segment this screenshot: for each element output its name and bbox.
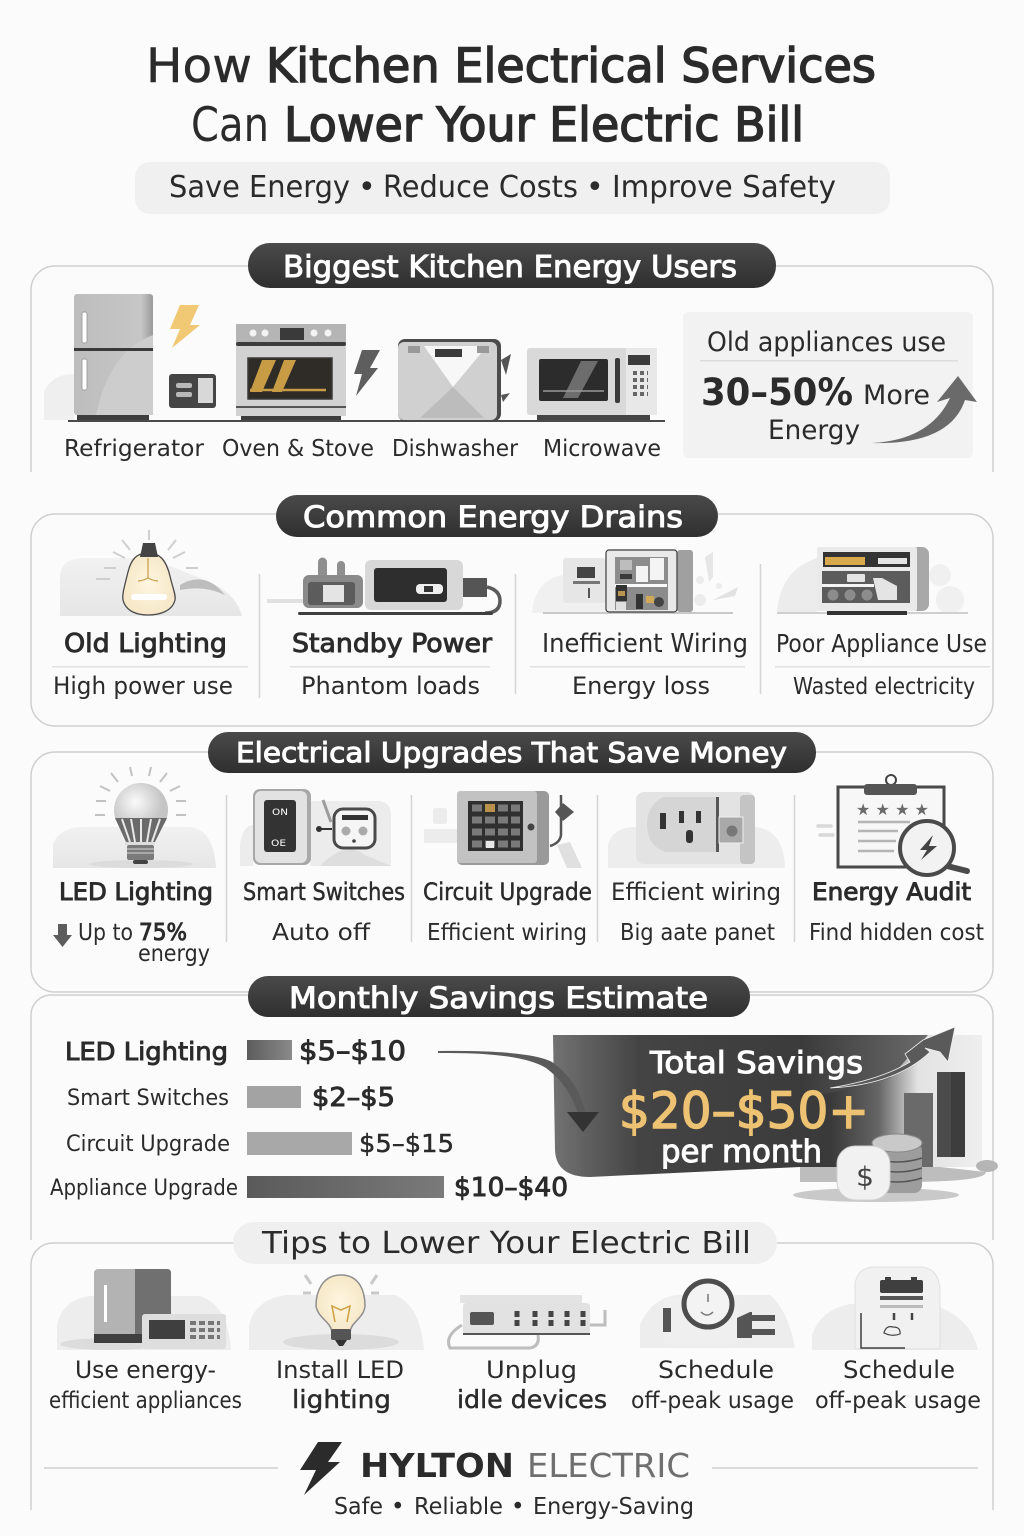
tip: install LED lighting: lighting [292,1385,391,1414]
labels: appliance names: Oven & Stove [222,434,374,462]
text: efficient wiring [611,878,781,946]
icon: grey lightning bolt [354,350,380,396]
text: poor appliance use: Wasted electricity [793,674,975,700]
text: efficient wiring: Big aate panet [620,920,775,946]
tip: schedule off-peak usage device: off-peak usage [815,1388,981,1414]
icon: curved arrow into panel [438,1051,586,1114]
text: energy audit [809,878,984,946]
text: LED lighting: LED Lighting [59,878,213,906]
text: inefficient wiring: Inefficient Wiring [542,629,748,659]
panel: common energy drains [31,495,993,726]
icon: dishwasher [398,339,511,421]
subtitle pill: Reduce Costs [383,170,578,205]
bar chart: monthly savings by upgrade: Circuit Upgrade [66,1132,230,1157]
text: energy audit: Find hidden cost [809,920,984,946]
text: LED lighting: energy [138,941,210,967]
callout: old appliances use 30-50% more energy: More [863,380,930,411]
text: smart switches: Auto off [272,920,371,946]
panel: biggest kitchen energy users [31,243,993,472]
panel: tips to lower your electric bill [31,1222,993,1510]
heading: electrical upgrades that save money [208,732,816,773]
icon: gold lightning bolt [170,305,200,348]
footer: Hylton Electric logo: • [511,1494,525,1520]
icon: logo lightning bolt [300,1442,342,1495]
heading: common energy drains [276,495,718,537]
footer: Hylton Electric logo: • [391,1494,405,1520]
icon: energy audit [818,775,967,875]
labels: appliance names: Dishwasher [392,434,518,462]
footer: Hylton Electric logo: Energy-Saving [533,1494,694,1520]
callout: total savings [438,1027,998,1202]
text: old lighting: Old Lighting [64,629,227,659]
icon: smart switch: OE [271,839,286,849]
icon: energy audit: ★★★★ [856,800,929,819]
title: Lower Your Electric Bill [284,98,804,153]
dividers [226,795,794,942]
text: energy audit: Energy Audit [812,878,971,906]
tip: schedule off-peak usage timer: Schedule [658,1356,774,1384]
panel: monthly savings estimate [31,976,998,1240]
icon: wall outlet [608,792,785,868]
footer: Hylton Electric logo [44,1442,978,1520]
heading: common energy drains: Common Energy Drains [303,500,683,534]
text: old lighting: High power use [53,672,233,700]
text: LED lighting: Up to [78,920,133,946]
bar chart: monthly savings by upgrade: $2–$5 [312,1083,395,1113]
icon: small appliance [169,374,216,408]
bar chart: monthly savings by upgrade: $10–$40 [454,1173,568,1203]
text: inefficient wiring [530,629,748,700]
subtitle pill: • [358,170,376,205]
text: circuit upgrade: Efficient wiring [427,920,587,946]
callout: old appliances use 30-50% more energy: 30–50% [701,371,853,414]
labels: appliance names: Refrigerator [64,434,204,462]
text: LED lighting [53,878,213,967]
tip: schedule off-peak usage device: Schedule [843,1356,955,1384]
footer: Hylton Electric logo: Reliable [414,1494,503,1520]
text: old lighting [52,629,248,700]
icon: coins and dollar: $ [856,1162,874,1193]
dividers [260,564,760,698]
tip: use energy-efficient appliances [49,1269,242,1414]
heading: biggest kitchen energy users [248,243,776,288]
callout: total savings: $20–$50+ [619,1082,869,1140]
text: standby power [290,629,492,700]
callout: old appliances use 30-50% more energy: Energy [768,415,860,446]
footer: Hylton Electric logo: ELECTRIC [527,1446,690,1485]
title [146,39,876,153]
bar chart: monthly savings by upgrade: Smart Switches [67,1086,229,1111]
tip: unplug idle devices [448,1295,607,1414]
tip: schedule off-peak usage device [812,1267,981,1414]
icon: old light bulb [60,530,242,616]
icon: rising arrow [872,376,977,443]
subtitle pill: Save Energy [169,170,350,205]
bar chart: monthly savings by upgrade: Appliance Upgrade [50,1176,238,1201]
callout: old appliances use 30-50% more energy: Old appliances use [707,327,946,358]
icon: inefficient wiring [532,550,738,614]
tip: install LED lighting: Install LED [276,1356,404,1384]
icon: smart switch: ON [272,808,288,818]
tip: schedule off-peak usage timer: off-peak usage [631,1388,794,1414]
tip: unplug idle devices: Unplug [486,1356,577,1384]
icon: oven and stove [236,324,346,421]
title: Kitchen Electrical Services [266,39,876,94]
shelf line [68,420,665,422]
icon: chart columns [904,1072,965,1167]
tip: use energy-efficient appliances: efficient appliances [49,1388,242,1414]
title: How [146,39,252,94]
callout: total savings: Total Savings [649,1046,863,1081]
bar chart: monthly savings by upgrade [50,1036,568,1203]
heading: biggest kitchen energy users: Biggest Kitchen Energy Users [283,250,737,285]
icon: smart switch [240,789,391,866]
heading: tips to lower your electric bill [233,1222,777,1264]
callout: total savings: per month [661,1134,822,1170]
heading: electrical upgrades that save money: Electrical Upgrades That Save Money [236,736,787,769]
text: circuit upgrade [423,878,592,946]
title: Can [191,98,269,153]
tip: use energy-efficient appliances: Use energy- [75,1356,216,1384]
text: LED lighting: 75% [139,920,187,946]
icon: coins and dollar [793,1134,959,1202]
bar chart: monthly savings by upgrade: $5–$15 [359,1129,454,1158]
icon: circuit upgrade [424,791,582,868]
text: smart switches [243,878,405,946]
panel: electrical upgrades that save money [31,732,993,992]
footer: Hylton Electric logo: HYLTON [360,1446,514,1485]
icon: LED bulb [53,767,216,868]
bar chart: monthly savings by upgrade: LED Lighting [65,1037,228,1066]
labels: appliance names: Microwave [543,434,661,462]
text: standby power: Standby Power [292,629,492,659]
callout: old appliances use 30-50% more energy [683,312,977,458]
tip: schedule off-peak usage timer [631,1281,795,1414]
labels: appliance names [64,434,661,462]
icon: poor appliance use [777,547,968,615]
heading: monthly savings estimate: Monthly Savings Estimate [289,981,708,1015]
footer: Hylton Electric logo: Safe [334,1494,383,1520]
tip: unplug idle devices: idle devices [457,1385,607,1414]
tip: install LED lighting [249,1275,424,1414]
subtitle pill [135,162,890,214]
icon: rising arrow [830,1027,955,1088]
icon: standby power [267,558,500,615]
text: poor appliance use: Poor Appliance Use [776,629,987,658]
text: smart switches: Smart Switches [243,878,405,906]
text: poor appliance use [775,629,990,700]
heading: monthly savings estimate [248,976,750,1017]
text: circuit upgrade: Circuit Upgrade [423,878,592,906]
subtitle pill: Improve Safety [612,170,836,205]
icon: down arrow [53,924,72,947]
text: standby power: Phantom loads [301,672,480,700]
text: efficient wiring: Efficient wiring [611,878,781,906]
heading: tips to lower your electric bill: Tips to Lower Your Electric Bill [261,1226,751,1261]
subtitle pill: • [586,170,604,205]
icon: microwave [527,348,657,421]
bar chart: monthly savings by upgrade: $5–$10 [299,1036,406,1067]
icon: refrigerator [44,294,153,421]
text: inefficient wiring: Energy loss [572,672,710,700]
